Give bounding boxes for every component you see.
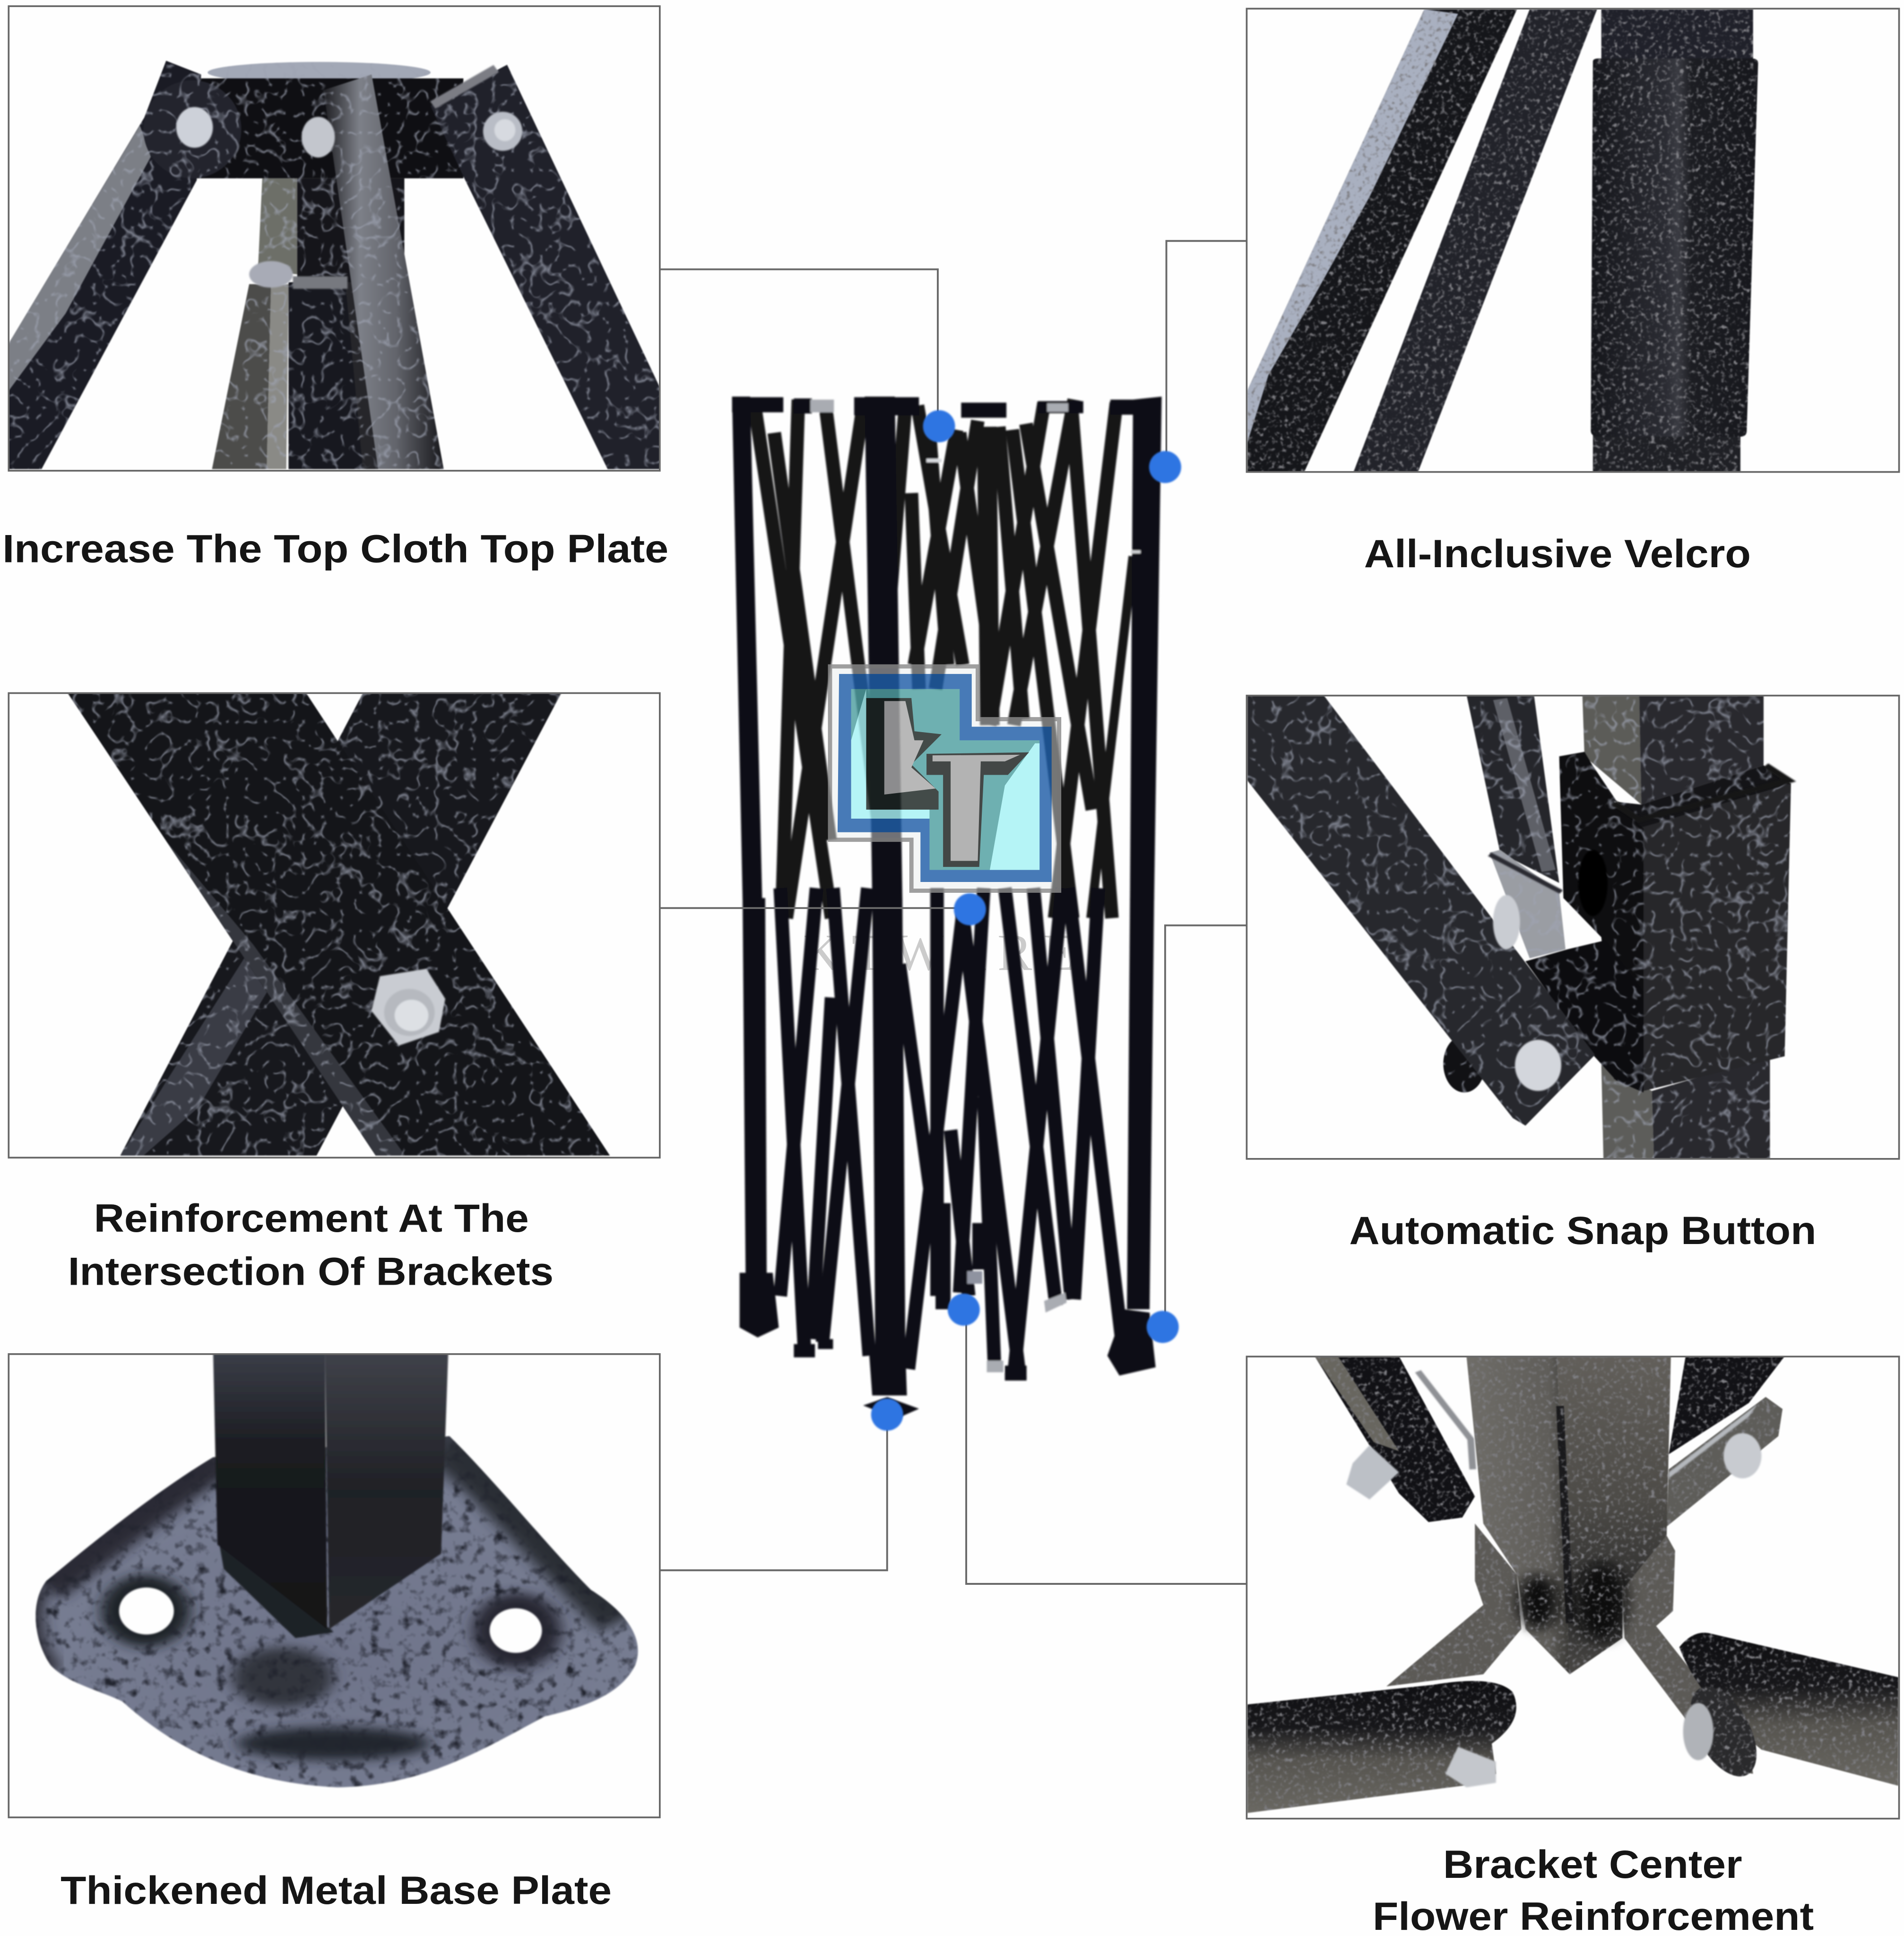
panel: velcro photo — [1246, 9, 1899, 472]
caption: bracket intersection: Intersection Of Brackets — [68, 1249, 554, 1293]
caption: flower reinforcement: Bracket Center — [1443, 1842, 1742, 1886]
callout markers — [871, 410, 1181, 1431]
panel: top plate photo — [8, 6, 660, 471]
caption: bracket intersection: Reinforcement At The — [94, 1196, 529, 1240]
panel: bracket intersection photo — [9, 693, 660, 1158]
folded canopy frame — [732, 397, 1162, 1419]
watermark logo — [830, 666, 1059, 890]
caption: flower reinforcement — [1373, 1842, 1814, 1936]
caption: top plate: Increase The Top Cloth Top Plate — [2, 526, 668, 570]
frame upper half — [732, 397, 1162, 918]
connector lines — [660, 241, 1246, 1584]
panel: flower reinforcement photo — [1246, 1356, 1899, 1819]
panel: snap button photo — [1246, 694, 1899, 1159]
frame lower half — [740, 888, 1156, 1419]
panel: base plate photo — [9, 1353, 660, 1817]
caption: snap button: Automatic Snap Button — [1349, 1208, 1816, 1253]
watermark text: KTWARE — [803, 924, 1075, 981]
caption: base plate: Thickened Metal Base Plate — [61, 1868, 612, 1912]
caption: velcro: All-Inclusive Velcro — [1364, 531, 1751, 576]
caption: bracket intersection — [68, 1196, 554, 1293]
